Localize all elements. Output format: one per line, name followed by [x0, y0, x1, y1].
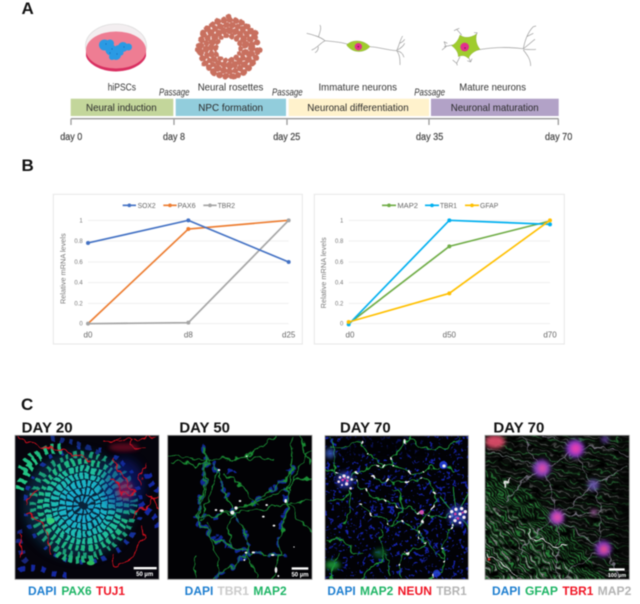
chart: SOX2 PAX6 TBR2 [53, 194, 302, 344]
micrograph: day 70 mixed culture [484, 434, 630, 580]
legend: DAPI MAP2 NEUN TBR1: MAP2 [360, 584, 394, 598]
chart: SOX2 PAX6 TBR2: d25 [282, 330, 296, 339]
chart: MAP2 TBR1 GFAP: MAP2 [397, 201, 418, 210]
chart: SOX2 PAX6 TBR2: 1 [79, 218, 83, 224]
scale bar: 100 µm [608, 573, 626, 579]
chart: MAP2 TBR1 GFAP [314, 194, 564, 344]
scale bar [134, 567, 157, 578]
timeline axis [71, 119, 558, 125]
chart: MAP2 TBR1 GFAP: Relative mRNA levels [321, 237, 328, 308]
panel C: micrographs right half [317, 420, 637, 598]
chart: SOX2 PAX6 TBR2: d8 [184, 330, 193, 339]
legend: DAPI MAP2 NEUN TBR1: TBR1 [436, 584, 467, 598]
chart: MAP2 TBR1 GFAP: GFAP [480, 201, 498, 210]
stage labels: Neural rosettes [198, 82, 263, 94]
chart: MAP2 TBR1 GFAP: 0.4 [335, 281, 344, 287]
day labels: day 70 [545, 132, 573, 143]
panel A: differentiation timeline [22, 0, 573, 143]
chart: SOX2 PAX6 TBR2: d0 [84, 330, 93, 339]
icon: immature neuron [307, 25, 405, 65]
chart: SOX2 PAX6 TBR2: Relative mRNA levels [60, 233, 67, 304]
chart: MAP2 TBR1 GFAP: 0.8 [335, 239, 344, 245]
legend: DAPI PAX6 TUJ1 [28, 584, 125, 598]
chart: SOX2 PAX6 TBR2: 0 [79, 322, 83, 328]
phase bars: Neuronal maturation [451, 102, 539, 114]
chart: SOX2 PAX6 TBR2: 0.4 [74, 281, 83, 287]
legend: DAPI MAP2 NEUN TBR1: NEUN [398, 584, 432, 598]
legend: DAPI TBR1 MAP2: TBR1 [217, 584, 249, 598]
legend: DAPI TBR1 MAP2: DAPI [185, 584, 213, 598]
scale bar: 50 µm [291, 573, 309, 579]
icon: mature neuron [442, 26, 536, 66]
chart: SOX2 PAX6 TBR2: 0.6 [74, 260, 83, 266]
chart: SOX2 PAX6 TBR2: 0.8 [74, 239, 83, 245]
chart: MAP2 TBR1 GFAP: d70 [543, 330, 557, 339]
panel letter C: C [21, 395, 33, 414]
chart: MAP2 TBR1 GFAP: 1 [340, 218, 344, 224]
legend: DAPI TBR1 MAP2: MAP2 [253, 584, 287, 598]
icon: neural rosette [196, 13, 263, 80]
legend: DAPI MAP2 NEUN TBR1 [327, 584, 467, 598]
panel B: expression line charts [22, 156, 564, 344]
heading DAY 20: DAY 20 [22, 420, 73, 436]
day labels: day 25 [273, 132, 301, 143]
legend: DAPI GFAP TBR1 MAP2 [492, 584, 632, 598]
chart: SOX2 PAX6 TBR2: SOX2 [138, 201, 156, 210]
heading DAY 50: DAY 50 [179, 420, 230, 436]
day labels: day 8 [163, 132, 185, 143]
passage labels: Passage [159, 86, 190, 98]
scale bar [291, 567, 309, 579]
chart: MAP2 TBR1 GFAP: d50 [443, 330, 457, 339]
phase bars: Neuronal differentiation [307, 102, 409, 114]
passage labels: Passage [414, 86, 445, 98]
chart: MAP2 TBR1 GFAP: 0.2 [335, 301, 344, 307]
panel letter B: B [22, 156, 34, 175]
chart: SOX2 PAX6 TBR2: PAX6 [178, 201, 196, 210]
passage labels: Passage [272, 86, 303, 98]
chart: MAP2 TBR1 GFAP: 0.6 [335, 260, 344, 266]
chart: MAP2 TBR1 GFAP: 0 [340, 322, 344, 328]
icon: petri dish with hiPSCs [86, 24, 146, 72]
legend: DAPI GFAP TBR1 MAP2: TBR1 [562, 584, 594, 598]
chart: SOX2 PAX6 TBR2: 0.2 [74, 301, 83, 307]
phase bars [71, 99, 559, 116]
day labels: day 35 [416, 132, 444, 143]
legend: DAPI PAX6 TUJ1: PAX6 [61, 584, 92, 598]
stage labels: hiPSCs [108, 82, 136, 94]
micrograph: day 20 rosette [15, 435, 159, 579]
stage labels [108, 82, 526, 94]
chart: MAP2 TBR1 GFAP: TBR1 [440, 201, 457, 210]
legend: DAPI GFAP TBR1 MAP2: GFAP [525, 584, 558, 598]
passage labels [159, 86, 445, 98]
phase bars: Neural induction [86, 102, 157, 114]
legend: DAPI MAP2 NEUN TBR1: DAPI [327, 584, 356, 598]
legend: DAPI TBR1 MAP2 [185, 584, 287, 598]
heading DAY 70: DAY 70 [340, 420, 391, 436]
stage labels: Immature neurons [318, 82, 397, 94]
legend: DAPI GFAP TBR1 MAP2: MAP2 [598, 584, 632, 598]
phase bars: NPC formation [198, 102, 263, 114]
legend: DAPI GFAP TBR1 MAP2: DAPI [492, 584, 521, 598]
legend: DAPI PAX6 TUJ1: DAPI [28, 584, 57, 598]
day labels [60, 132, 573, 143]
chart: MAP2 TBR1 GFAP: d0 [346, 330, 355, 339]
heading DAY 70 second: DAY 70 [493, 420, 544, 436]
legend: DAPI PAX6 TUJ1: TUJ1 [96, 584, 125, 598]
stage labels: Mature neurons [459, 82, 526, 94]
micrograph: day 70 neuron network [324, 435, 469, 580]
scale bar: 50 µm [136, 572, 153, 578]
panel C: micrographs left half [15, 395, 312, 598]
chart: SOX2 PAX6 TBR2: TBR2 [218, 201, 235, 210]
day labels: day 0 [60, 132, 83, 143]
micrograph: day 50 network [168, 435, 312, 579]
scale bar [608, 568, 626, 579]
